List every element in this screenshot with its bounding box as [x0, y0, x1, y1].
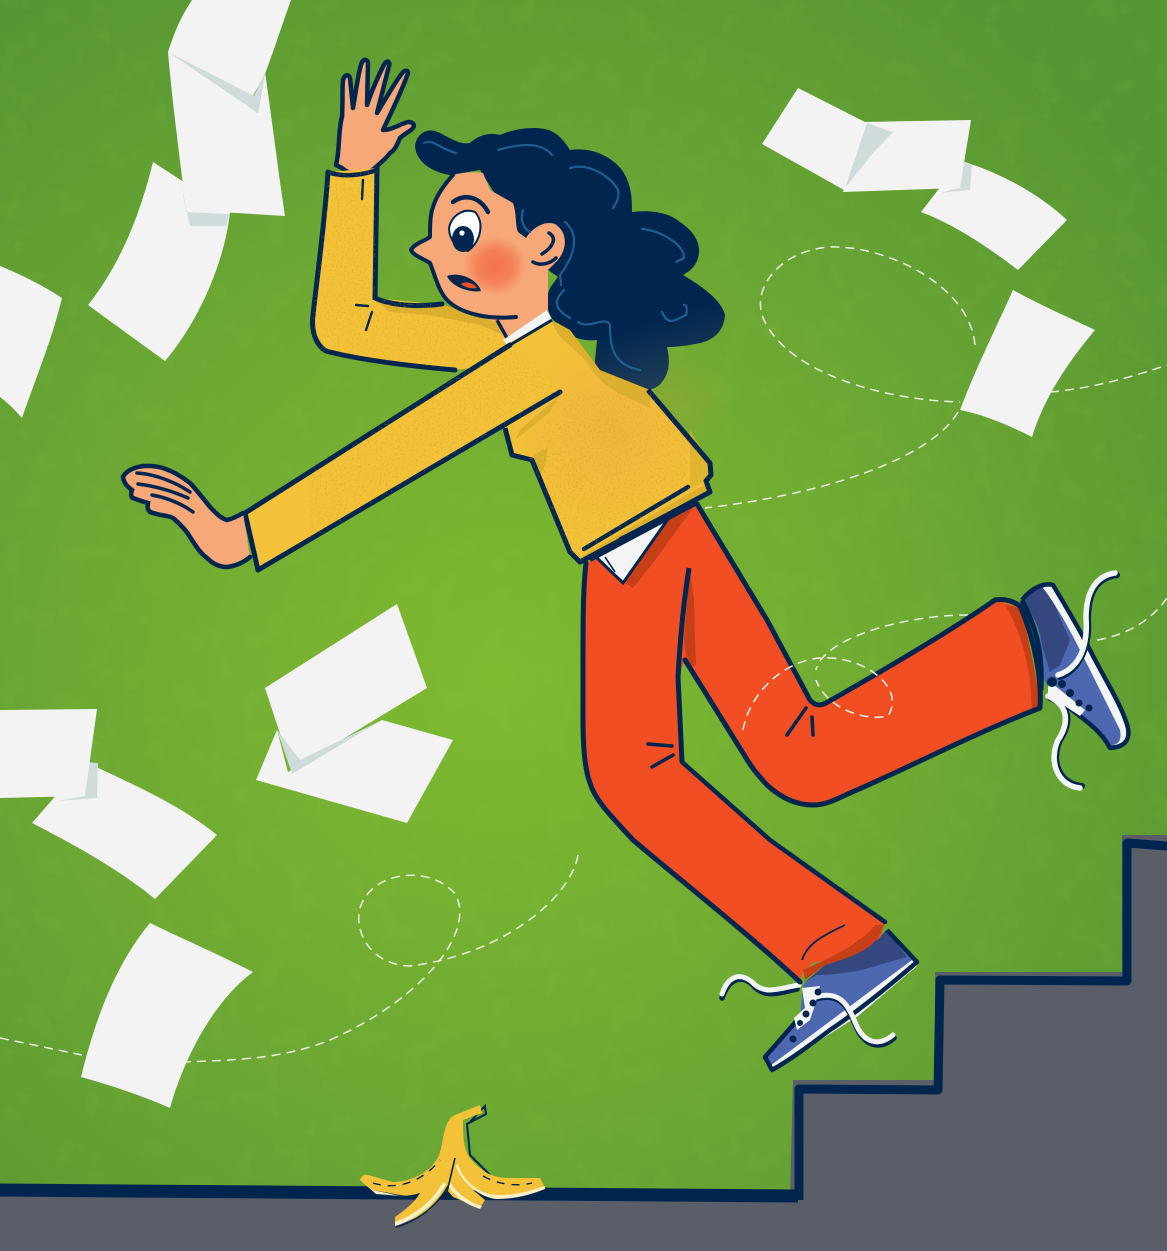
- sweater speckle texture: [310, 170, 720, 570]
- eye: [449, 211, 480, 252]
- back arm: sleeve: [312, 168, 540, 370]
- pants: [583, 504, 1042, 982]
- paper: lower left stacked sheets: [0, 709, 217, 899]
- banana peel: [360, 1105, 545, 1227]
- eyebrow: [453, 197, 488, 212]
- upper shoe: [1022, 573, 1130, 788]
- woman: falling figure: [123, 60, 1130, 1072]
- hair highlights: [424, 142, 687, 370]
- mouth: [447, 275, 481, 291]
- staircase and floor: [0, 835, 1167, 1251]
- paper: left sheet: [88, 162, 230, 361]
- paper: middle stacked sheets: [256, 604, 453, 823]
- paper: top right stacked sheets: [762, 88, 1067, 270]
- sweater body: [505, 320, 711, 562]
- collar: [503, 310, 552, 348]
- front hand: [123, 466, 250, 567]
- paper: right sheet: [960, 290, 1095, 437]
- paper: bottom left sheet: [81, 923, 253, 1108]
- lower shoe: [722, 930, 917, 1072]
- front arm: sleeve: [245, 320, 560, 570]
- paper: top left stacked sheets: [168, 0, 291, 226]
- back raised hand: [336, 60, 414, 174]
- flight paths: dashed lines: [0, 247, 1167, 1062]
- paper: far left sheet: [0, 266, 62, 418]
- flight path over pants: [743, 658, 892, 730]
- shirt tail: [590, 503, 697, 583]
- face: [411, 172, 565, 338]
- hair: [415, 128, 725, 390]
